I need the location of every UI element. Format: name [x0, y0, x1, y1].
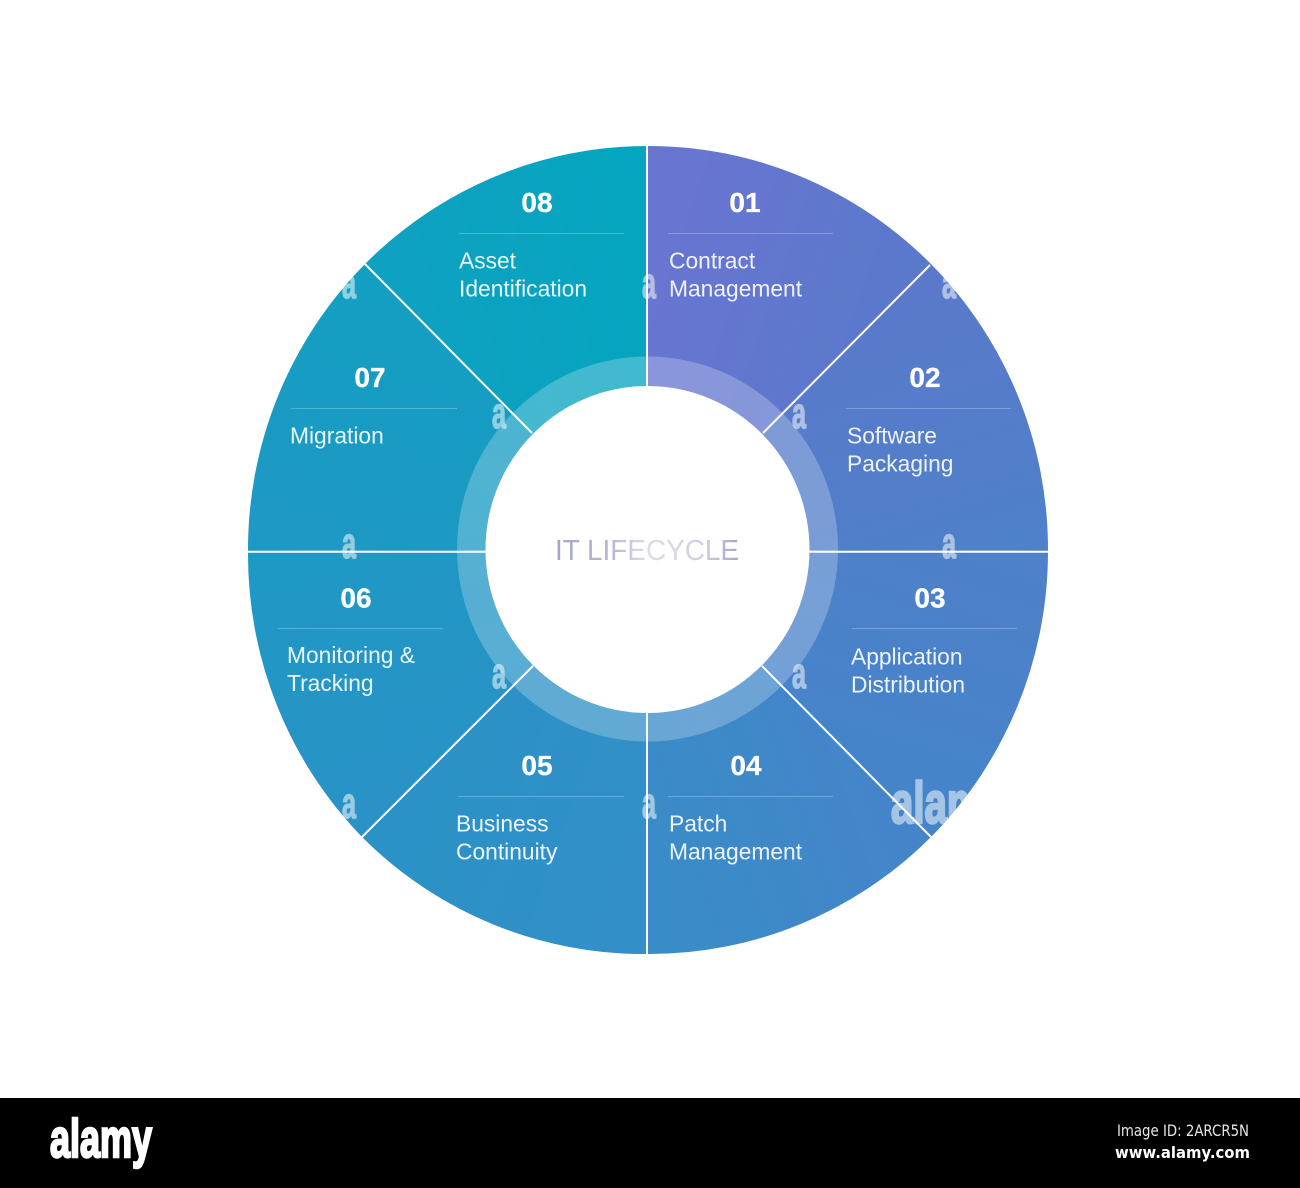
label 01: Management	[669, 276, 803, 302]
label 02: Packaging	[847, 450, 953, 476]
label 03: Distribution	[851, 672, 965, 698]
number 07: 07	[354, 362, 386, 393]
panel: 08 Asset Identification	[365, 146, 648, 550]
watermark word: alamy	[891, 771, 1005, 836]
panel: 01 Contract Management	[648, 146, 931, 550]
number 08: 08	[521, 187, 553, 218]
number 01: 01	[729, 187, 761, 218]
panel: 07 Migration	[248, 264, 648, 551]
panel: 03 Application Distribution	[648, 550, 1048, 837]
number 04: 04	[730, 750, 762, 781]
wedge 03	[648, 550, 1048, 837]
label 05: Business	[456, 810, 549, 836]
label 04: Patch	[669, 810, 727, 836]
panel: 05 Business Continuity	[362, 550, 648, 954]
watermark letters: a	[642, 779, 656, 828]
watermark letters: a	[342, 259, 356, 308]
wedge 01	[648, 146, 931, 550]
label 07: Migration	[290, 422, 384, 448]
watermark letters: a	[342, 779, 356, 828]
watermark letters: a	[492, 649, 506, 698]
watermark letters: a	[942, 259, 956, 308]
watermark letters: a	[792, 649, 806, 698]
label 02: Software	[847, 422, 937, 448]
watermark letters: a	[642, 259, 656, 308]
wedge 05	[362, 550, 648, 954]
label 03: Application	[851, 644, 963, 670]
wedge 07	[248, 264, 648, 551]
segment divider lines	[248, 146, 1048, 954]
watermark letters	[342, 259, 956, 828]
label 01: Contract	[669, 248, 755, 274]
watermark letters: a	[942, 519, 956, 568]
wedge 06	[248, 550, 648, 837]
footer logo: alamy	[50, 1109, 152, 1169]
watermark letters: a	[342, 519, 356, 568]
number 03: 03	[914, 582, 946, 614]
number 02: 02	[909, 362, 941, 393]
translucent ring	[457, 356, 838, 742]
number 05: 05	[521, 750, 553, 781]
label 05: Continuity	[456, 838, 558, 864]
wedge 04	[648, 550, 931, 954]
wedge 08	[365, 146, 648, 550]
label 06: Monitoring &	[287, 642, 415, 668]
label 08: Identification	[459, 276, 587, 302]
panel: 02 Software Packaging	[648, 264, 1048, 551]
centre title: IT LIFECYCLE	[555, 535, 739, 567]
label 08: Asset	[459, 248, 516, 274]
watermark letters: a	[792, 389, 806, 438]
number 06: 06	[340, 582, 372, 614]
image id: Image ID: 2ARCR5N	[1117, 1121, 1249, 1140]
footer bar	[0, 1098, 1300, 1188]
watermark letters: a	[492, 389, 506, 438]
panel: 04 Patch Management	[648, 550, 931, 954]
panel: 06 Monitoring & Tracking	[248, 550, 648, 837]
label 06: Tracking	[287, 670, 374, 696]
label 04: Management	[669, 838, 803, 864]
website: www.alamy.com	[1115, 1143, 1250, 1162]
wedge 02	[648, 264, 1048, 551]
centre circle	[486, 386, 810, 713]
